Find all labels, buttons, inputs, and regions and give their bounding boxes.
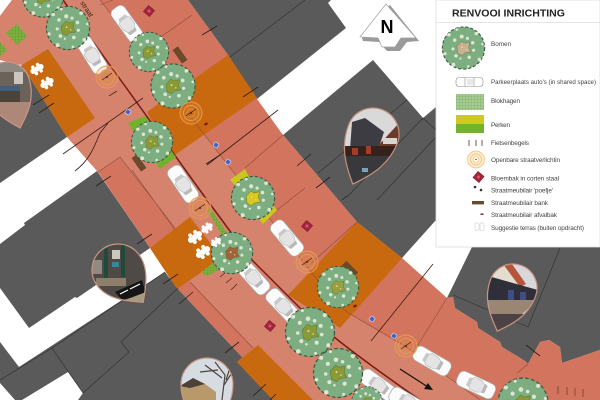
bike symbols — [125, 109, 397, 339]
legend: parking — [456, 78, 596, 86]
legend: pouf — [474, 186, 553, 194]
north arrow — [360, 4, 419, 51]
legend: bike racks — [469, 140, 529, 147]
legend: terrace: Suggestie terras (buiten opdracht) — [491, 225, 584, 232]
legend: bike racks: Fietsenbegels — [491, 140, 529, 147]
arrows and dimension lines — [33, 26, 540, 400]
legend: planter box — [473, 171, 559, 183]
planters in corten steel — [143, 5, 313, 332]
legend panel — [436, 0, 600, 247]
legend: hedges: Blokhagen — [491, 98, 520, 105]
street name: straat — [78, 0, 94, 19]
legend: parking: Parkeerplaats auto's (in shared space) — [491, 79, 596, 86]
terrace seating — [28, 61, 223, 262]
red centre line — [63, 0, 420, 400]
legend: trees — [442, 27, 511, 69]
parked cars — [75, 3, 498, 400]
legend: street lighting: Openbare straatverlichtin — [491, 157, 560, 164]
legend title: RENVOOI INRICHTING — [452, 8, 565, 20]
photo pin 1 — [0, 62, 32, 129]
street lights — [96, 66, 417, 357]
green planters — [0, 24, 277, 276]
direction arrow — [400, 369, 433, 390]
waste bins — [204, 122, 357, 308]
photo pin 3 — [91, 243, 146, 303]
north arrow: N — [380, 17, 394, 37]
legend: street lighting — [468, 151, 560, 168]
legend: pouf: Straatmeubilair 'poefje' — [491, 188, 553, 194]
legend: trees: Bomen — [491, 41, 511, 48]
legend: planting beds — [456, 115, 510, 133]
photo pin 5 — [486, 263, 538, 332]
legend: waste bin: Straatmeubilair afvalbak — [491, 212, 558, 219]
central shared space — [0, 0, 480, 400]
legend: planting beds: Perken — [491, 122, 510, 129]
photo pin 4 — [180, 355, 235, 400]
orange paved areas — [22, 49, 402, 400]
benches — [132, 47, 358, 277]
legend: hedges — [456, 94, 520, 110]
legend: terrace — [475, 223, 584, 232]
photo pin 2 — [344, 107, 400, 185]
legend: planter box: Bloembak in corten staal — [491, 176, 559, 182]
legend: bench: Straatmeubilair bank — [491, 200, 549, 207]
bike racks — [109, 91, 583, 397]
